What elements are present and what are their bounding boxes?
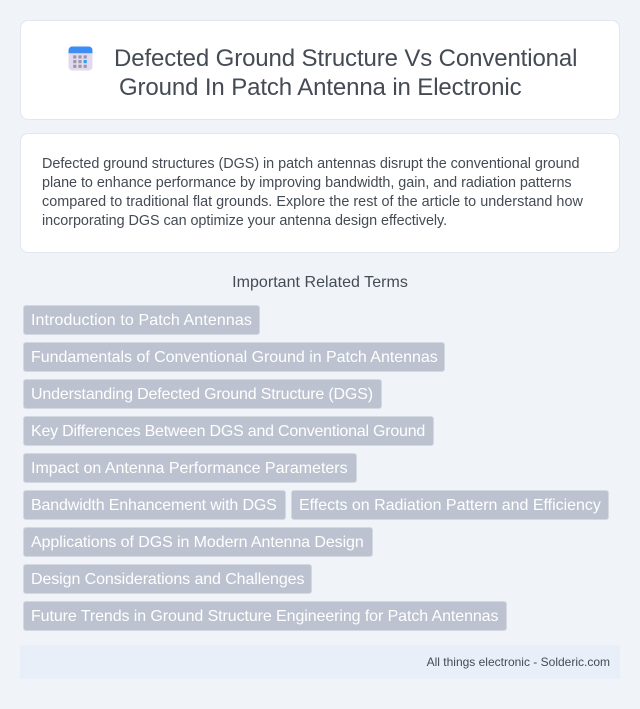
footer bar — [20, 645, 620, 679]
tag: Key Differences Between DGS and Conventional Ground — [31, 423, 425, 440]
title card — [20, 20, 620, 120]
tag: Effects on Radiation Pattern and Efficiency — [299, 497, 601, 514]
tag: Bandwidth Enhancement with DGS — [31, 497, 277, 514]
intro text: plane to enhance performance by improving bandwidth, gain, and radiation patterns — [42, 175, 572, 191]
title line 1: Defected Ground Structure Vs Conventional — [114, 45, 577, 72]
tag — [23, 490, 286, 520]
tag — [23, 416, 434, 446]
icon: calendar — [68, 46, 92, 70]
intro text: incorporating DGS can optimize your antenna design effectively. — [42, 213, 447, 229]
tag: Impact on Antenna Performance Parameters — [31, 460, 348, 477]
tag: Design Considerations and Challenges — [31, 571, 304, 588]
footer text: All things electronic - Solderic.com — [427, 655, 610, 669]
tag list — [23, 305, 609, 631]
intro text — [42, 156, 583, 229]
tag — [23, 527, 373, 557]
heading: important related terms: Important Related Terms — [232, 274, 408, 291]
tag — [23, 305, 260, 335]
tag — [23, 564, 312, 594]
tag: Applications of DGS in Modern Antenna Design — [31, 534, 364, 551]
tag: Understanding Defected Ground Structure (DGS) — [31, 386, 373, 403]
tag: Fundamentals of Conventional Ground in Patch Antennas — [31, 349, 438, 366]
intro card — [20, 133, 620, 253]
intro text: compared to traditional flat grounds. Explore the rest of the article to understand how — [42, 194, 583, 210]
tag: Future Trends in Ground Structure Engineering for Patch Antennas — [31, 608, 498, 625]
tag — [23, 379, 382, 409]
tag — [23, 601, 507, 631]
tag: Introduction to Patch Antennas — [31, 312, 252, 329]
title line 2: Ground In Patch Antenna in Electronic — [119, 74, 521, 101]
tag — [291, 490, 609, 520]
tag — [23, 453, 357, 483]
tag — [23, 342, 445, 372]
intro text: Defected ground structures (DGS) in patch antennas disrupt the conventional ground — [42, 156, 580, 172]
